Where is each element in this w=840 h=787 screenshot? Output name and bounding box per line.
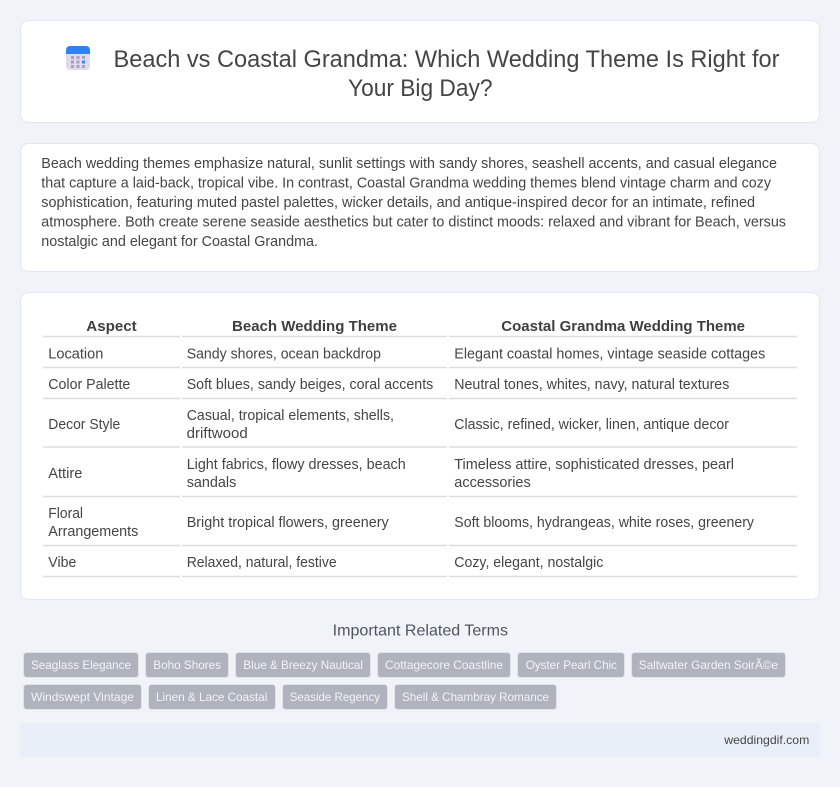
tag: Linen & Lace Coastal [148,684,276,710]
tag: Seaglass Elegance: Seaglass Elegance [31,658,131,672]
panel: comparison table [20,292,820,600]
intro paragraph: sophistication, featuring muted pastel palettes, wicker details, and antique-inspired decor for an intimate, refined [41,195,755,211]
row: vibe: Vibe [48,555,76,571]
row: color palette [48,377,729,393]
intro paragraph: that capture a laid-back, tropical vibe. In contrast, Coastal Grandma wedding themes blend vintage charm and cozy [41,176,772,192]
title [114,46,780,102]
row: attire: sandals [187,475,236,491]
icon: calendar [66,46,90,70]
intro paragraph: nostalgic and elegant for Coastal Grandma. [41,234,318,250]
tag: Saltwater Garden Soirée: Saltwater Garden SoirÃ©e [639,658,778,672]
heading: important related terms: Important Related Terms [333,622,508,639]
row: location: Location [48,346,103,362]
tag: Shell & Chambray Romance: Shell & Chambray Romance [402,690,549,704]
row: attire: Timeless attire, sophisticated dresses, pearl [454,457,734,473]
row: vibe [48,555,603,571]
row: color palette: Soft blues, sandy beiges, coral accents [187,377,433,393]
tag: Seaglass Elegance [24,652,138,678]
row: floral arrangements: Soft blooms, hydrangeas, white roses, greenery [454,515,755,531]
row: attire: Attire [48,466,82,482]
row: attire: Light fabrics, flowy dresses, beach [187,457,406,473]
tag: Linen & Lace Coastal: Linen & Lace Coastal [156,690,267,704]
panel: title header [20,20,820,122]
footer [20,723,820,757]
footer site name: weddingdif.com [723,733,809,747]
row: decor style: driftwood [187,426,248,442]
row: decor style [48,408,729,442]
related term tags [24,652,786,710]
row: decor style: Decor Style [48,417,120,433]
row: floral arrangements: Floral [48,506,83,522]
tag: Shell & Chambray Romance [394,684,556,710]
row: attire [48,457,734,491]
row: location: Sandy shores, ocean backdrop [187,346,381,362]
table header row: Coastal Grandma Wedding Theme [501,319,745,335]
row: vibe: Cozy, elegant, nostalgic [454,555,603,571]
row: decor style: Classic, refined, wicker, linen, antique decor [454,417,729,433]
intro paragraph [41,156,786,250]
row: color palette: Color Palette [48,377,130,393]
row: floral arrangements [48,506,755,540]
tag: Boho Shores: Boho Shores [153,658,221,672]
row: attire: accessories [454,475,531,491]
tag: Blue & Breezy Nautical [236,652,370,678]
row: vibe: Relaxed, natural, festive [187,555,337,571]
tag: Cottagecore Coastline: Cottagecore Coastline [385,658,503,672]
intro paragraph: atmosphere. Both create serene seaside aesthetics but cater to distinct moods: relaxed and vibrant for Beach, versus [41,215,786,231]
tag: Windswept Vintage: Windswept Vintage [31,690,134,704]
row: floral arrangements: Bright tropical flowers, greenery [187,515,389,531]
tag: Windswept Vintage [24,684,142,710]
row: location [48,346,765,362]
row: color palette: Neutral tones, whites, navy, natural textures [454,377,729,393]
tag: Oyster Pearl Chic: Oyster Pearl Chic [526,658,617,672]
tag: Seaside Regency: Seaside Regency [290,690,380,704]
tag: Saltwater Garden Soirée [632,652,786,678]
table header row: Aspect [86,319,137,335]
tag: Boho Shores [146,652,228,678]
tag: Oyster Pearl Chic [518,652,624,678]
title: Your Big Day? [348,75,492,102]
tag: Seaside Regency [282,684,388,710]
tag: Blue & Breezy Nautical: Blue & Breezy Nautical [243,658,363,672]
row: floral arrangements: Arrangements [48,524,138,540]
row: decor style: Casual, tropical elements, shells, [187,408,394,424]
panel: introduction [20,144,820,272]
table header row [86,319,745,335]
row: location: Elegant coastal homes, vintage seaside cottages [454,346,765,362]
table header row: Beach Wedding Theme [232,319,397,335]
tag: Cottagecore Coastline [378,652,510,678]
intro paragraph: Beach wedding themes emphasize natural, sunlit settings with sandy shores, seashell accents, and casual elegance [41,156,777,172]
title: Beach vs Coastal Grandma: Which Wedding Theme Is Right for [114,46,780,73]
